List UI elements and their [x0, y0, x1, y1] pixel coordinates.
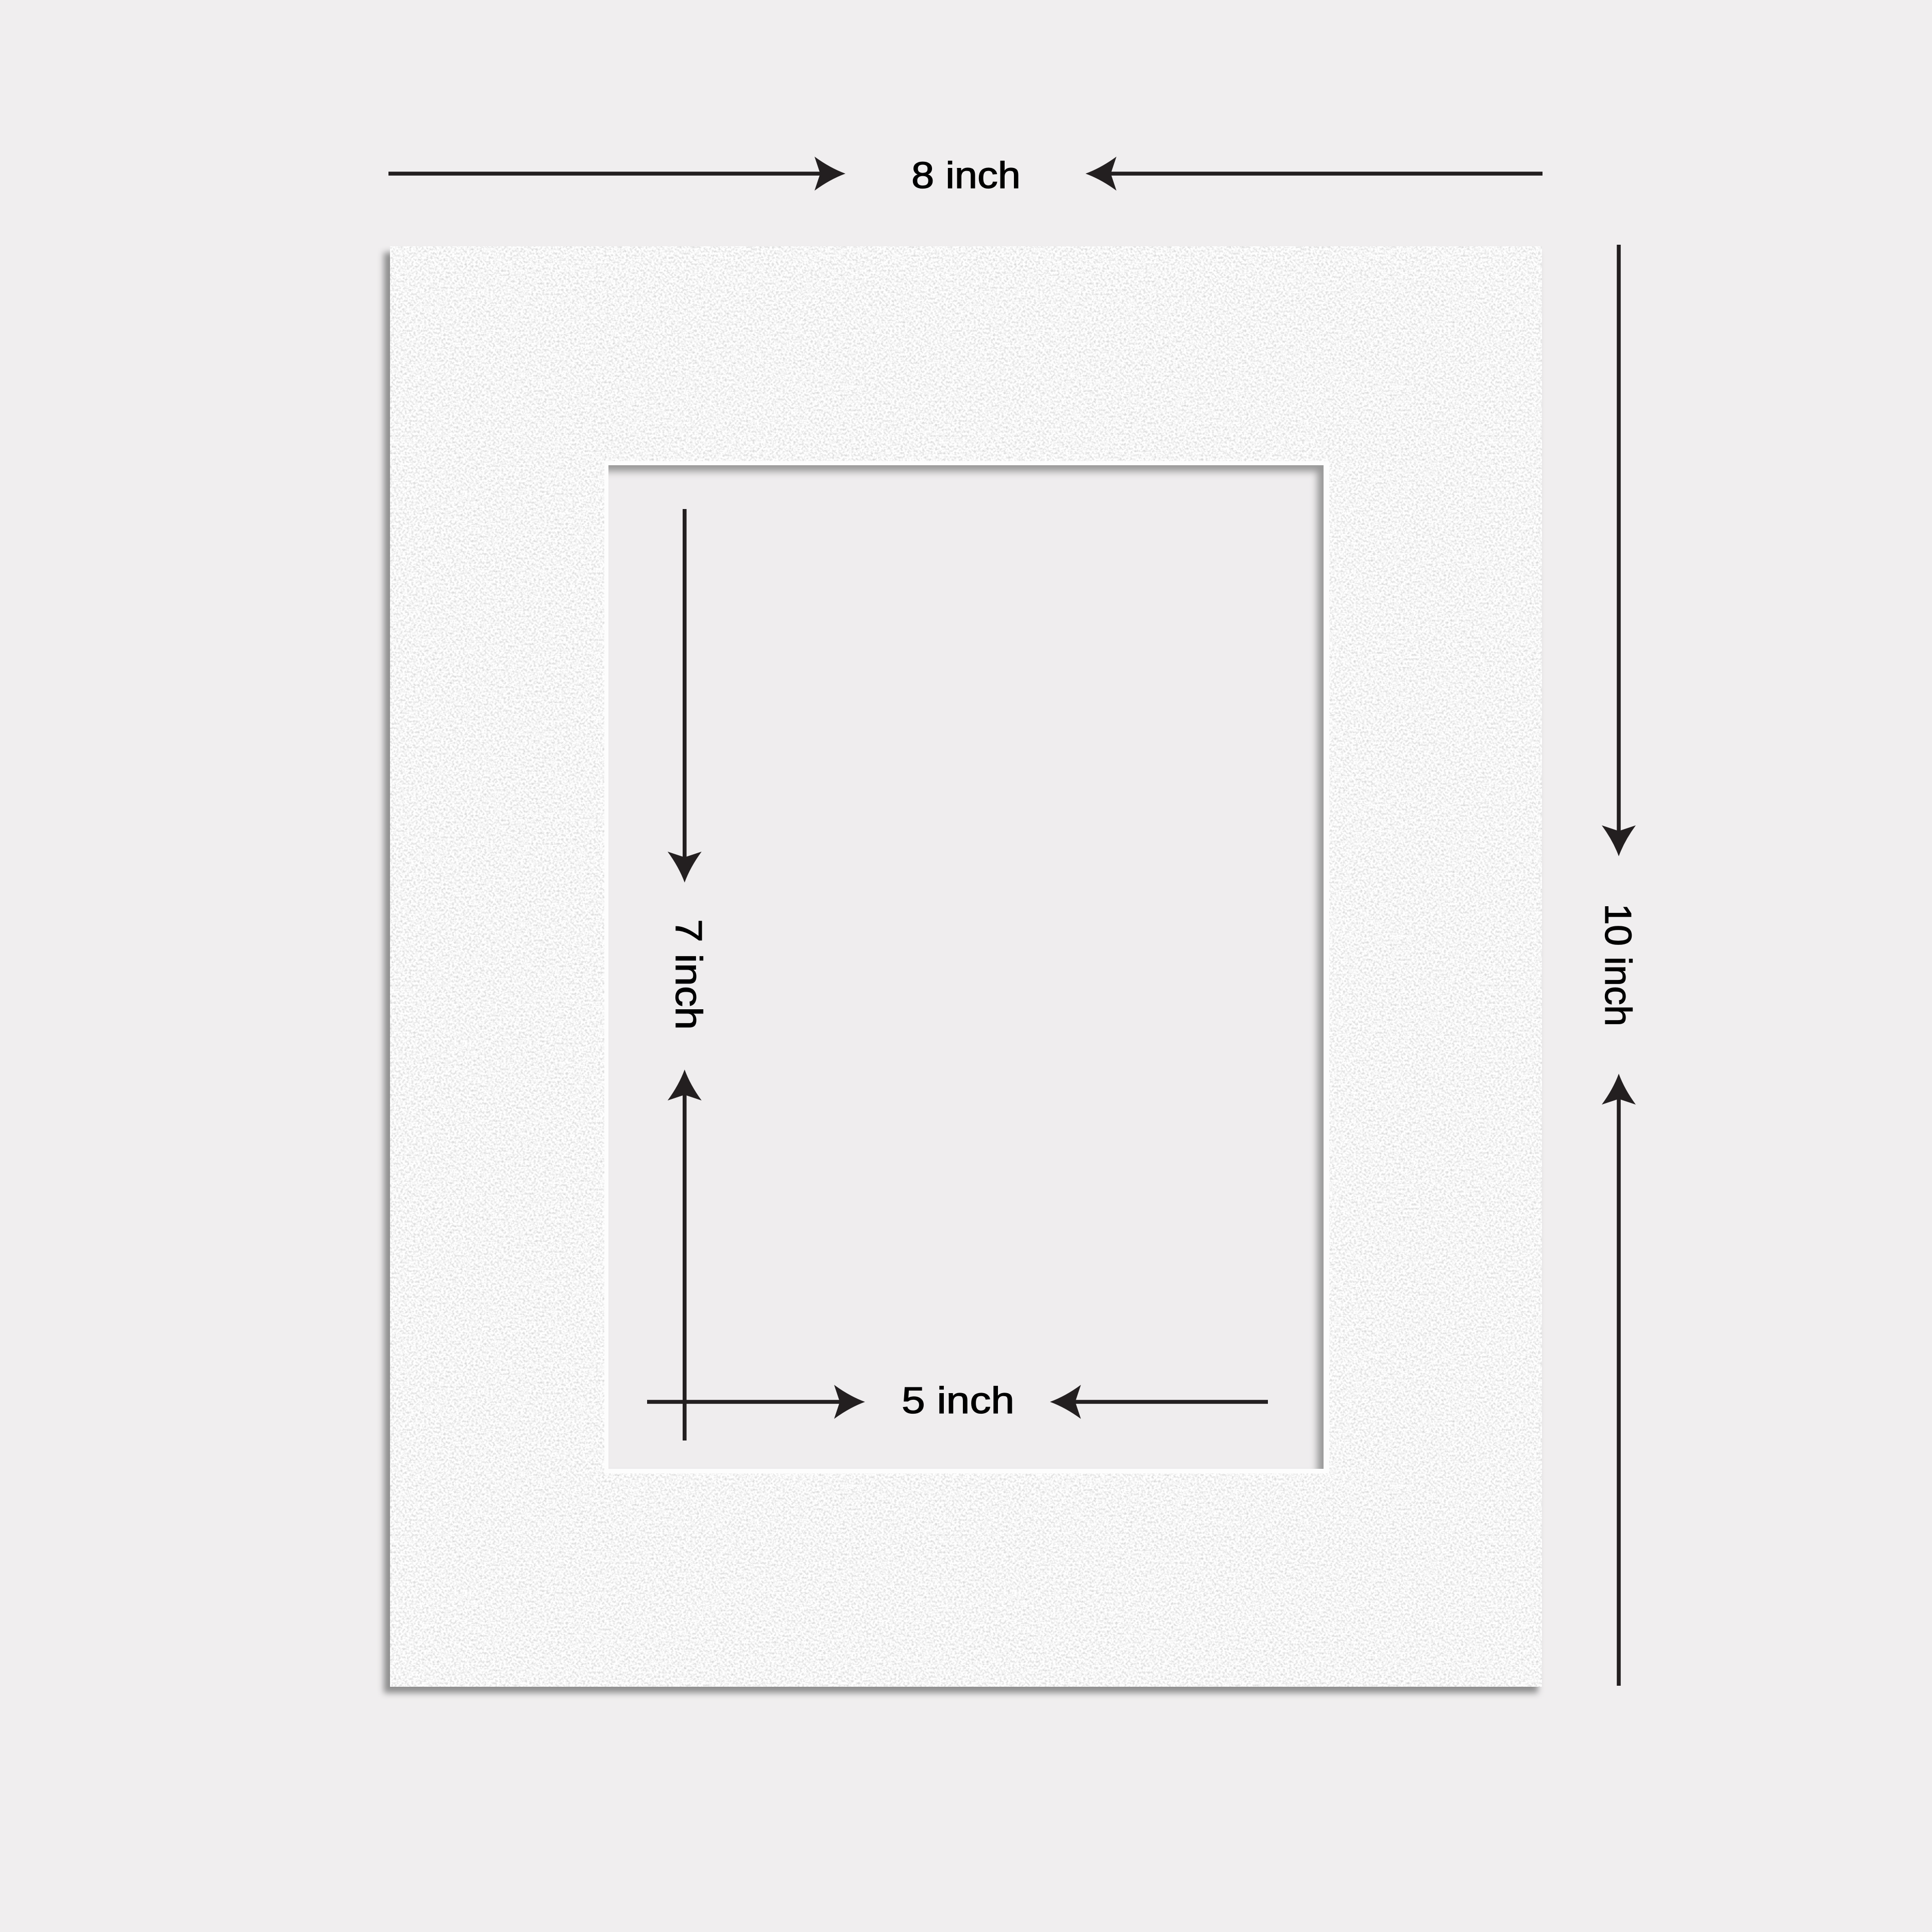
panel: textured mat board: [390, 246, 1542, 1687]
label: 8 inch: 8 inch: [911, 155, 1021, 196]
arrow: top width, right side pointing left: [1086, 157, 1543, 191]
arrow: right height, top pointing down: [1602, 245, 1636, 856]
white bevel around window opening: [604, 461, 1329, 1473]
arrow: window width, left side pointing right: [647, 1385, 865, 1419]
arrow: window height, top pointing down: [668, 509, 702, 883]
arrow: window height, bottom pointing up: [668, 1070, 702, 1440]
window opening with inner shadow: [608, 465, 1324, 1469]
arrow: top width, left side pointing right: [388, 157, 845, 191]
label: 5 inch: 5 inch: [902, 1380, 1014, 1421]
arrow: right height, bottom pointing up: [1602, 1074, 1636, 1686]
mat board drop shadow: [384, 252, 1538, 1693]
label: 7 inch: 7 inch: [668, 919, 709, 1030]
label: 10 inch: 10 inch: [1597, 904, 1638, 1026]
arrow: window width, right side pointing left: [1050, 1385, 1268, 1419]
